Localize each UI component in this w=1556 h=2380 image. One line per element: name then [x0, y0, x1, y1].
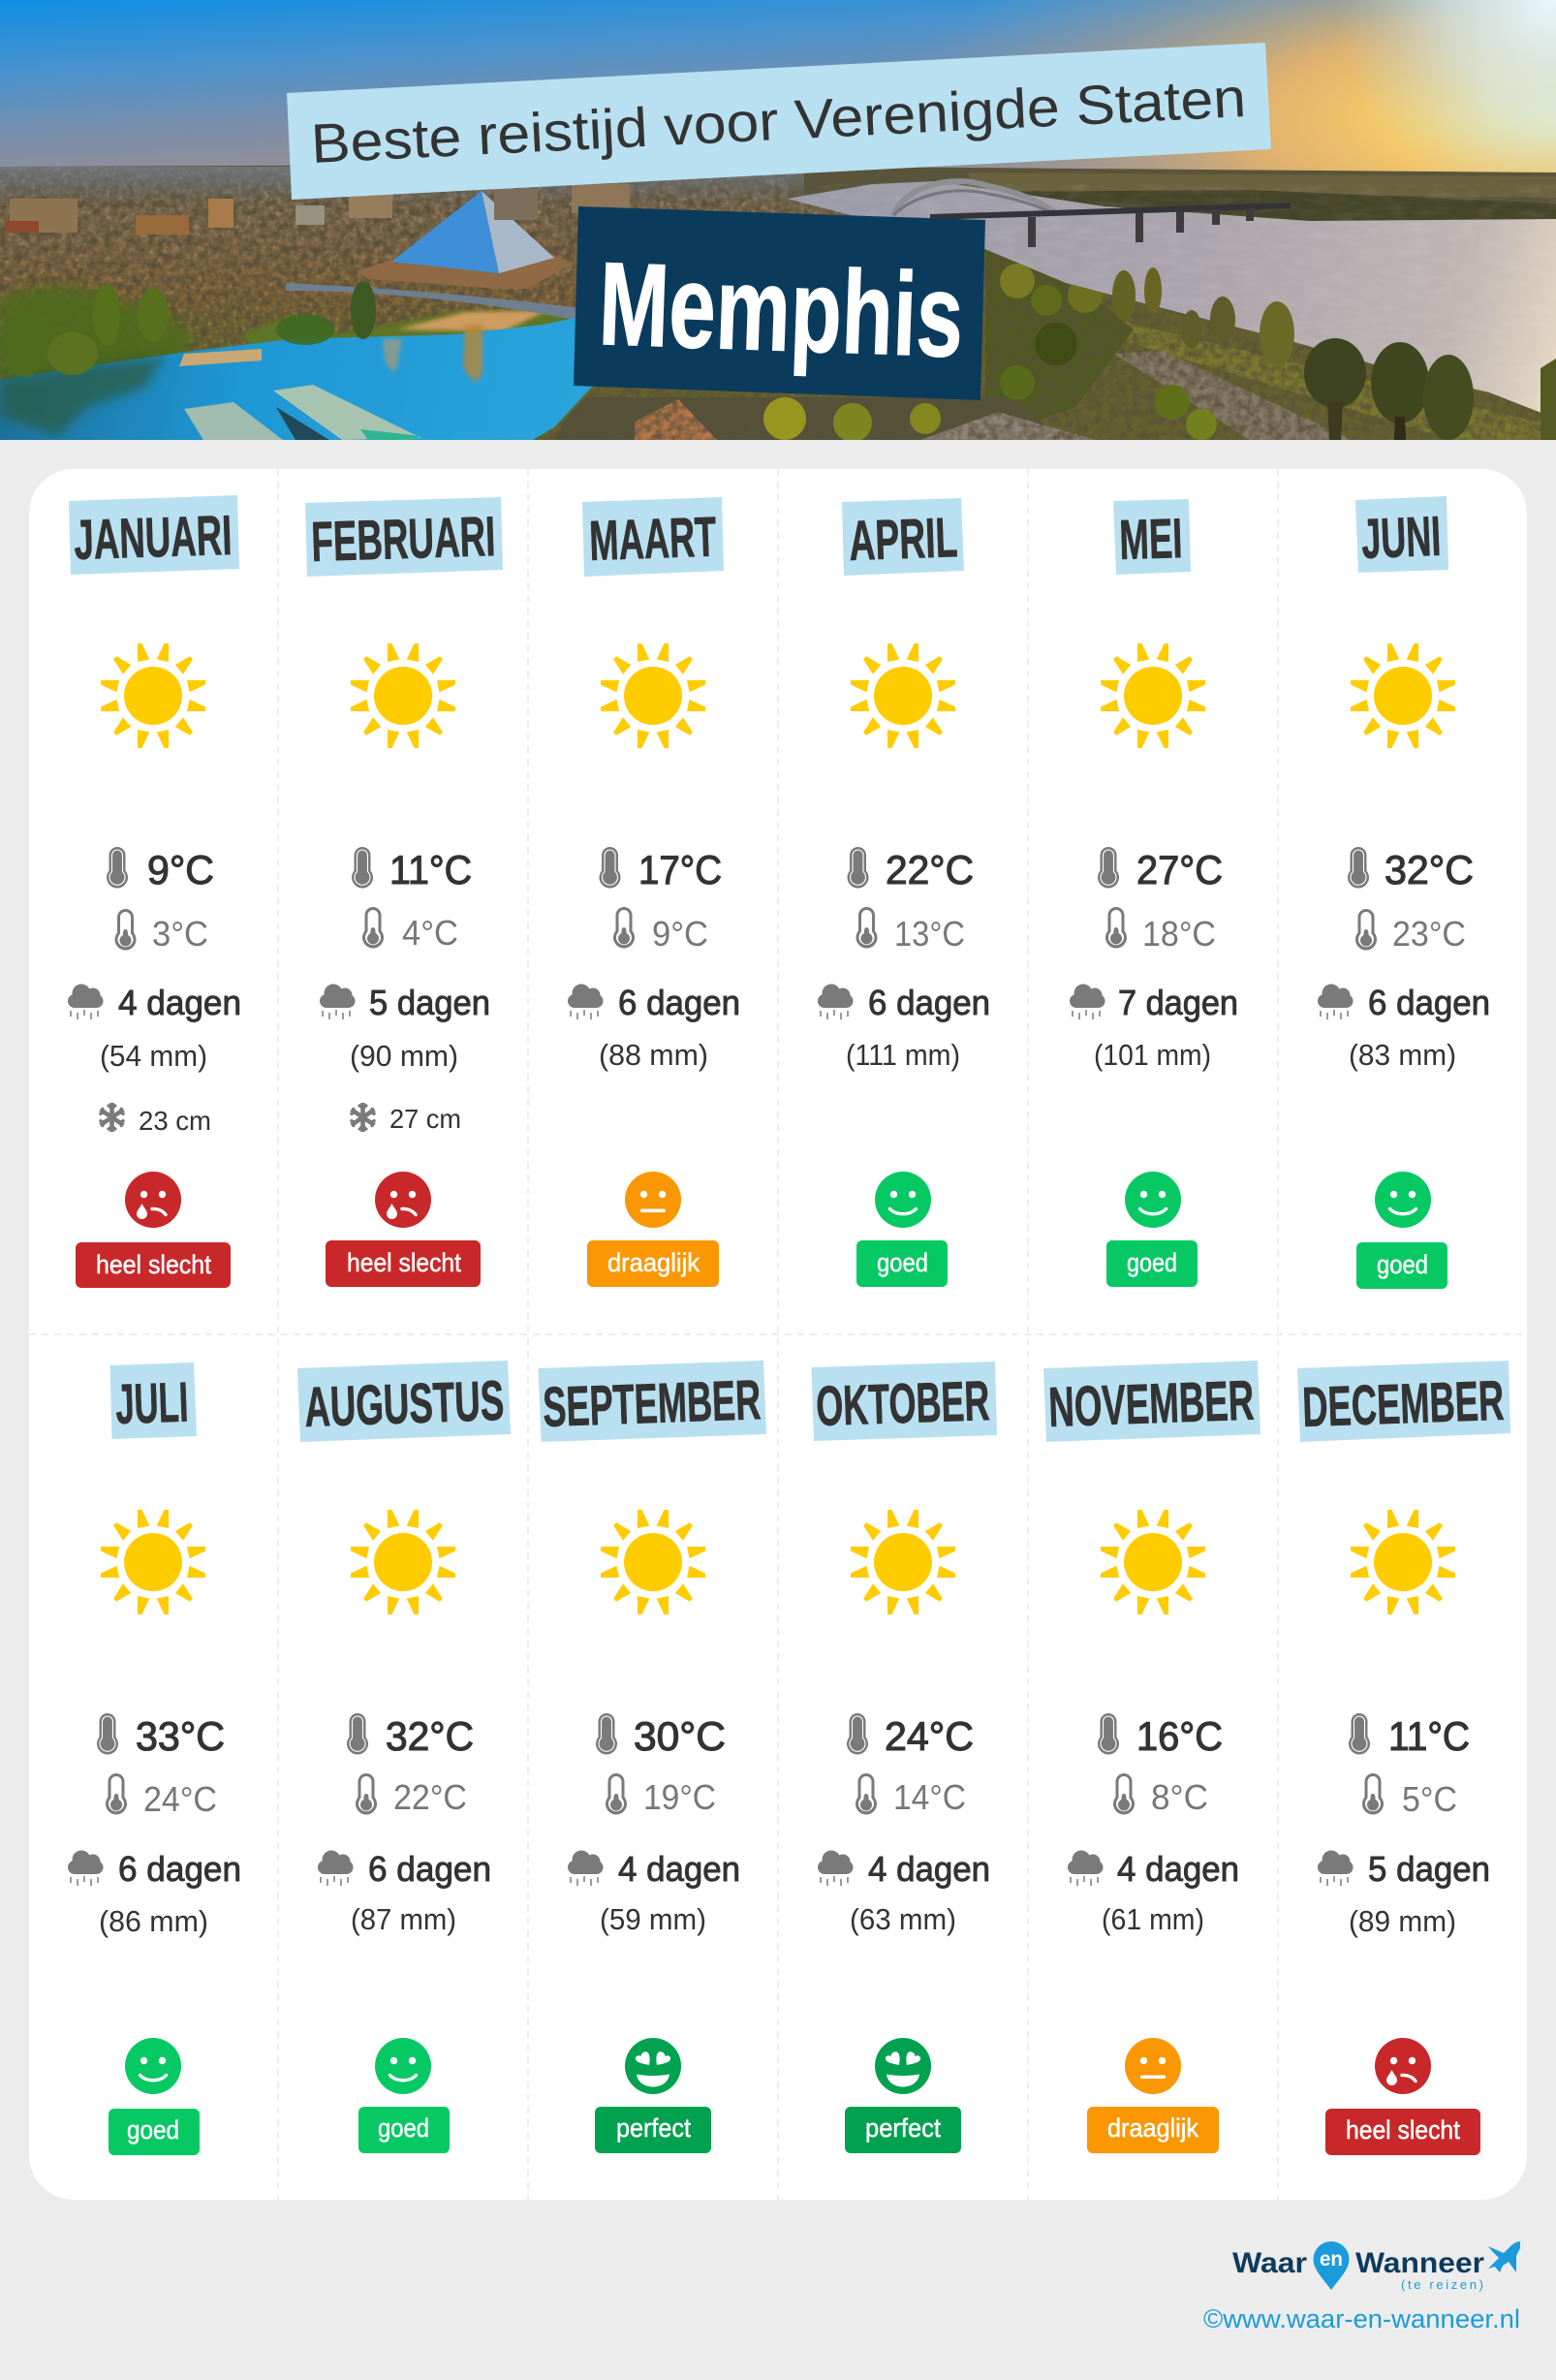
high temperature: 32°C [1385, 847, 1474, 892]
rain days: 6 dagen [618, 983, 740, 1022]
icon: map pin [1314, 2241, 1349, 2290]
icon: good face [1125, 1172, 1181, 1228]
month heading: oktober: OKTOBER [815, 1369, 990, 1438]
rain days: 6 dagen [1368, 983, 1490, 1022]
icon: sun [601, 1510, 705, 1614]
panel: oktober [812, 1362, 997, 2153]
rain days: 4 dagen [118, 983, 241, 1022]
month heading: februari: FEBRUARI [310, 505, 496, 574]
icon: rain cloud [1318, 1851, 1353, 1886]
rating: perfect: perfect [865, 2114, 941, 2143]
rating: perfect: perfect [616, 2114, 691, 2143]
icon: rain cloud [318, 1851, 353, 1886]
panel: juni [1318, 496, 1490, 1289]
title: Memphis: Memphis [597, 237, 966, 382]
icon: good face [1375, 1172, 1431, 1228]
icon: neutral face [625, 1172, 681, 1228]
rating: heel slecht [76, 1242, 231, 1288]
rating: heel slecht [326, 1240, 481, 1287]
icon: thermometer low [1355, 909, 1377, 950]
rain days: 5 dagen [369, 983, 490, 1022]
icon: sun [1101, 1510, 1205, 1614]
rainfall: (101 mm) [1094, 1038, 1211, 1072]
rainfall: (54 mm) [100, 1039, 207, 1073]
rating: goed: goed [877, 1248, 928, 1277]
icon: good face [375, 2038, 431, 2094]
icon: thermometer high [107, 847, 128, 888]
rainfall: (59 mm) [600, 1902, 706, 1936]
month heading: juli [110, 1362, 197, 1439]
icon: thermometer high [1348, 847, 1369, 888]
high temperature: 11°C [1388, 1713, 1470, 1759]
month heading: april: APRIL [848, 506, 958, 573]
low temperature: 24°C [143, 1779, 217, 1819]
month heading: juli: JULI [114, 1370, 189, 1436]
icon: thermometer low [106, 1773, 127, 1814]
icon: thermometer high [352, 847, 373, 888]
low temperature: 14°C [893, 1777, 966, 1817]
month heading: augustus [297, 1361, 511, 1442]
panel: mei [1070, 499, 1238, 1287]
rain days: 5 dagen [1368, 1849, 1490, 1889]
icon: good face [125, 2038, 181, 2094]
month heading: juni: JUNI [1360, 505, 1442, 571]
icon: very bad face [375, 1172, 431, 1228]
icon: very bad face [125, 1172, 181, 1228]
icon: good face [875, 1172, 931, 1228]
rating: goed [856, 1240, 948, 1287]
icon: snowflake [99, 1103, 124, 1132]
logo: Waar en Wanneer: Wanneer [1355, 2247, 1484, 2279]
rating: perfect [845, 2107, 961, 2153]
icon: sun [351, 1510, 455, 1614]
rain days: 6 dagen [118, 1849, 241, 1889]
icon: sun [851, 1510, 955, 1614]
rating: goed: goed [1127, 1248, 1177, 1277]
low temperature: 4°C [402, 913, 458, 953]
rain days: 4 dagen [868, 1849, 990, 1889]
low temperature: 9°C [652, 914, 708, 954]
icon: sun [601, 643, 705, 748]
panel: december [1297, 1361, 1510, 2155]
icon: thermometer low [856, 1773, 877, 1814]
icon: rain cloud [818, 1851, 853, 1886]
month heading: januari [69, 495, 239, 575]
month heading: juni [1355, 496, 1448, 573]
snowfall: 27 cm [389, 1104, 461, 1134]
rainfall: (90 mm) [350, 1039, 458, 1073]
icon: neutral face [1125, 2038, 1181, 2094]
panel: augustus [297, 1361, 511, 2153]
rainfall: (89 mm) [1349, 1904, 1456, 1938]
rating: heel slecht: heel slecht [96, 1250, 211, 1279]
icon: map pin: en [1320, 2248, 1343, 2270]
icon: thermometer high [596, 1713, 617, 1754]
panel: februari [305, 497, 503, 1287]
copyright url: ©www.waar-en-wanneer.nl [1203, 2304, 1520, 2333]
rainfall: (86 mm) [99, 1904, 208, 1938]
rainfall: (61 mm) [1102, 1902, 1204, 1936]
low temperature: 5°C [1402, 1779, 1457, 1819]
icon: rain cloud [1318, 985, 1353, 1019]
icon: thermometer low [1362, 1773, 1384, 1814]
icon: sun [101, 643, 205, 748]
rating: goed: goed [378, 2114, 429, 2143]
month heading: november [1043, 1361, 1260, 1442]
rating: heel slecht: heel slecht [1346, 2115, 1460, 2145]
month heading: november: NOVEMBER [1047, 1369, 1255, 1439]
icon: airplane [1488, 2241, 1520, 2272]
icon: thermometer high [347, 1713, 368, 1754]
high temperature: 17°C [638, 847, 722, 892]
icon: very bad face [1375, 2038, 1431, 2094]
icon: sun [1351, 1510, 1455, 1614]
high temperature: 24°C [885, 1713, 974, 1759]
icon: rain cloud [68, 985, 103, 1019]
hero photo: Memphis skyline and river at sunset [0, 0, 1556, 442]
logo: Waar en Wanneer: (te reizen) [1401, 2277, 1483, 2292]
high temperature: 22°C [886, 847, 974, 892]
banner: city name [574, 206, 985, 400]
icon: perfect face [875, 2038, 931, 2094]
panel: maart [568, 497, 740, 1287]
logo: Waar en Wanneer: Waar [1232, 2247, 1307, 2279]
high temperature: 16°C [1136, 1713, 1223, 1759]
month heading: september: SEPTEMBER [542, 1368, 762, 1439]
rain days: 6 dagen [868, 983, 990, 1022]
month heading: februari [305, 497, 503, 577]
banner: subtitle [287, 43, 1271, 200]
low temperature: 3°C [152, 914, 208, 954]
icon: sun [351, 643, 455, 748]
snowfall: 23 cm [139, 1106, 211, 1136]
icon: thermometer high [599, 847, 620, 888]
month heading: april [842, 498, 964, 576]
icon: rain cloud [818, 985, 853, 1019]
icon: rain cloud [1070, 985, 1105, 1019]
rating: draaglijk: draaglijk [607, 1248, 700, 1277]
icon: thermometer low [114, 909, 136, 950]
rating: draaglijk [587, 1240, 719, 1287]
low temperature: 13°C [894, 914, 965, 954]
low temperature: 22°C [393, 1777, 467, 1817]
icon: thermometer low [1113, 1773, 1135, 1814]
panel: november [1043, 1361, 1260, 2153]
rating: heel slecht [1325, 2109, 1480, 2155]
icon: rain cloud [568, 1851, 603, 1886]
rainfall: (83 mm) [1349, 1038, 1456, 1072]
rating: draaglijk: draaglijk [1107, 2114, 1198, 2143]
rainfall: (63 mm) [850, 1902, 956, 1936]
icon: sun [101, 1510, 205, 1614]
icon: thermometer low [1105, 907, 1127, 948]
icon: thermometer low [856, 907, 878, 948]
rating: goed [358, 2107, 450, 2153]
high temperature: 11°C [389, 847, 472, 892]
month heading: oktober [812, 1362, 997, 1441]
low temperature: 23°C [1392, 914, 1466, 954]
icon: thermometer low [356, 1773, 377, 1814]
icon: thermometer high [97, 1713, 118, 1754]
icon: sun [1101, 643, 1205, 748]
rainfall: (88 mm) [599, 1038, 708, 1072]
month heading: september [539, 1361, 766, 1442]
icon: sun [1351, 643, 1455, 748]
panel: juli [68, 1362, 241, 2155]
rainfall: (87 mm) [351, 1902, 456, 1936]
rating: goed: goed [127, 2115, 179, 2145]
rating: goed [109, 2109, 200, 2155]
rating: goed [1106, 1240, 1198, 1287]
high temperature: 32°C [386, 1713, 474, 1759]
month heading: mei: MEI [1118, 507, 1183, 572]
icon: rain cloud [320, 985, 355, 1019]
low temperature: 8°C [1151, 1777, 1208, 1817]
month heading: augustus: AUGUSTUS [303, 1369, 505, 1439]
icon: perfect face [625, 2038, 681, 2094]
panel: september [539, 1361, 766, 2153]
month heading: maart [582, 497, 724, 577]
rating: perfect [595, 2107, 711, 2153]
icon: thermometer low [613, 907, 635, 948]
icon: thermometer high [847, 1713, 868, 1754]
icon: thermometer low [362, 907, 384, 948]
rain days: 4 dagen [1117, 1849, 1239, 1889]
rating: goed: goed [1377, 1250, 1428, 1279]
rating: draaglijk [1087, 2107, 1219, 2153]
icon: rain cloud [568, 985, 603, 1019]
high temperature: 27°C [1136, 847, 1223, 892]
subtitle text: Beste reistijd voor Verenigde Staten [309, 67, 1247, 175]
rain days: 6 dagen [368, 1849, 491, 1889]
high temperature: 33°C [136, 1713, 225, 1759]
rain days: 4 dagen [618, 1849, 740, 1889]
high temperature: 30°C [634, 1713, 726, 1759]
panel: white card with months [29, 469, 1527, 2200]
icon: thermometer high [1349, 1713, 1370, 1754]
low temperature: 19°C [643, 1777, 716, 1817]
icon: thermometer high [1098, 1713, 1119, 1754]
rating: heel slecht: heel slecht [347, 1248, 461, 1277]
month heading: januari: JANUARI [73, 504, 233, 572]
month heading: maart: MAART [588, 505, 717, 573]
icon: snowflake [351, 1103, 376, 1132]
icon: sun [851, 643, 955, 748]
panel: januari [68, 495, 241, 1288]
icon: rain cloud [1068, 1851, 1103, 1886]
icon: thermometer low [606, 1773, 627, 1814]
rainfall: (111 mm) [846, 1038, 960, 1072]
month heading: mei [1113, 499, 1191, 575]
icon: thermometer high [847, 847, 868, 888]
panel: april [818, 498, 990, 1287]
high temperature: 9°C [147, 847, 214, 892]
low temperature: 18°C [1142, 914, 1216, 954]
rating: goed [1356, 1242, 1447, 1289]
logo: Waar en Wanneer [1232, 2241, 1520, 2292]
icon: thermometer high [1098, 847, 1119, 888]
rain days: 7 dagen [1118, 983, 1238, 1022]
icon: rain cloud [68, 1851, 103, 1886]
